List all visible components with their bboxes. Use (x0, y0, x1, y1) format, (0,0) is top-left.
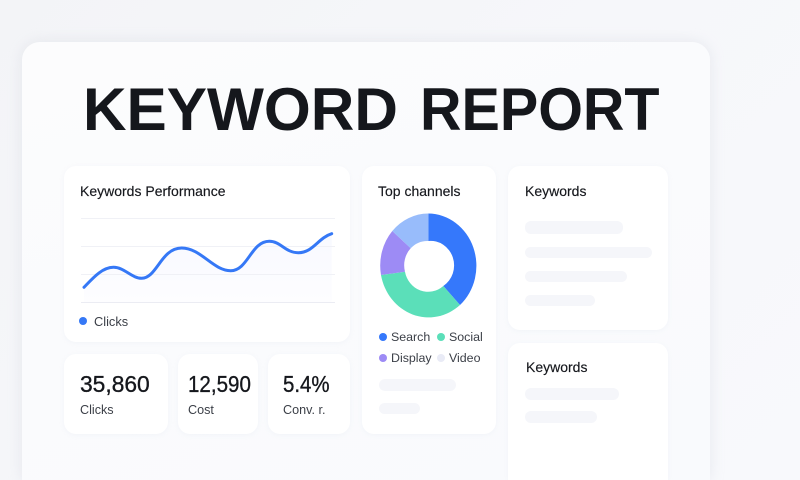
legend: channels: Display (391, 351, 432, 365)
label: Cost (188, 403, 214, 417)
panel: top channels (362, 166, 496, 434)
value: 35,860 (80, 371, 150, 397)
heading: keywords: Keywords (526, 359, 587, 375)
panel: keywords performance (64, 166, 350, 342)
placeholder rows (525, 388, 619, 423)
placeholder bars (379, 379, 456, 414)
donut chart (380, 214, 476, 318)
legend: channels (379, 330, 483, 365)
title: KEYWORD (83, 76, 398, 143)
stat: cost (178, 354, 258, 434)
title: REPORT (420, 76, 659, 143)
heading: keywords performance: Keywords Performance (80, 183, 226, 199)
legend: channels: Search (391, 330, 430, 344)
value: 5.4% (283, 371, 330, 397)
stat: conversion rate (268, 354, 350, 434)
panel: keywords bottom (508, 343, 668, 480)
legend: clicks (79, 314, 128, 329)
label: Clicks (80, 403, 114, 417)
stat: clicks (64, 354, 168, 434)
title (83, 76, 659, 143)
value: 12,590 (188, 371, 251, 397)
line chart (81, 218, 335, 303)
label: Conv. r. (283, 403, 325, 417)
legend: clicks: Clicks (94, 314, 128, 329)
main panel (22, 42, 710, 480)
legend: channels: Social (449, 330, 483, 344)
heading: top channels: Top channels (378, 183, 461, 199)
legend: channels: Video (449, 351, 480, 365)
panel: keywords top (508, 166, 668, 330)
heading: keywords: Keywords (525, 183, 586, 199)
placeholder rows (525, 221, 652, 306)
